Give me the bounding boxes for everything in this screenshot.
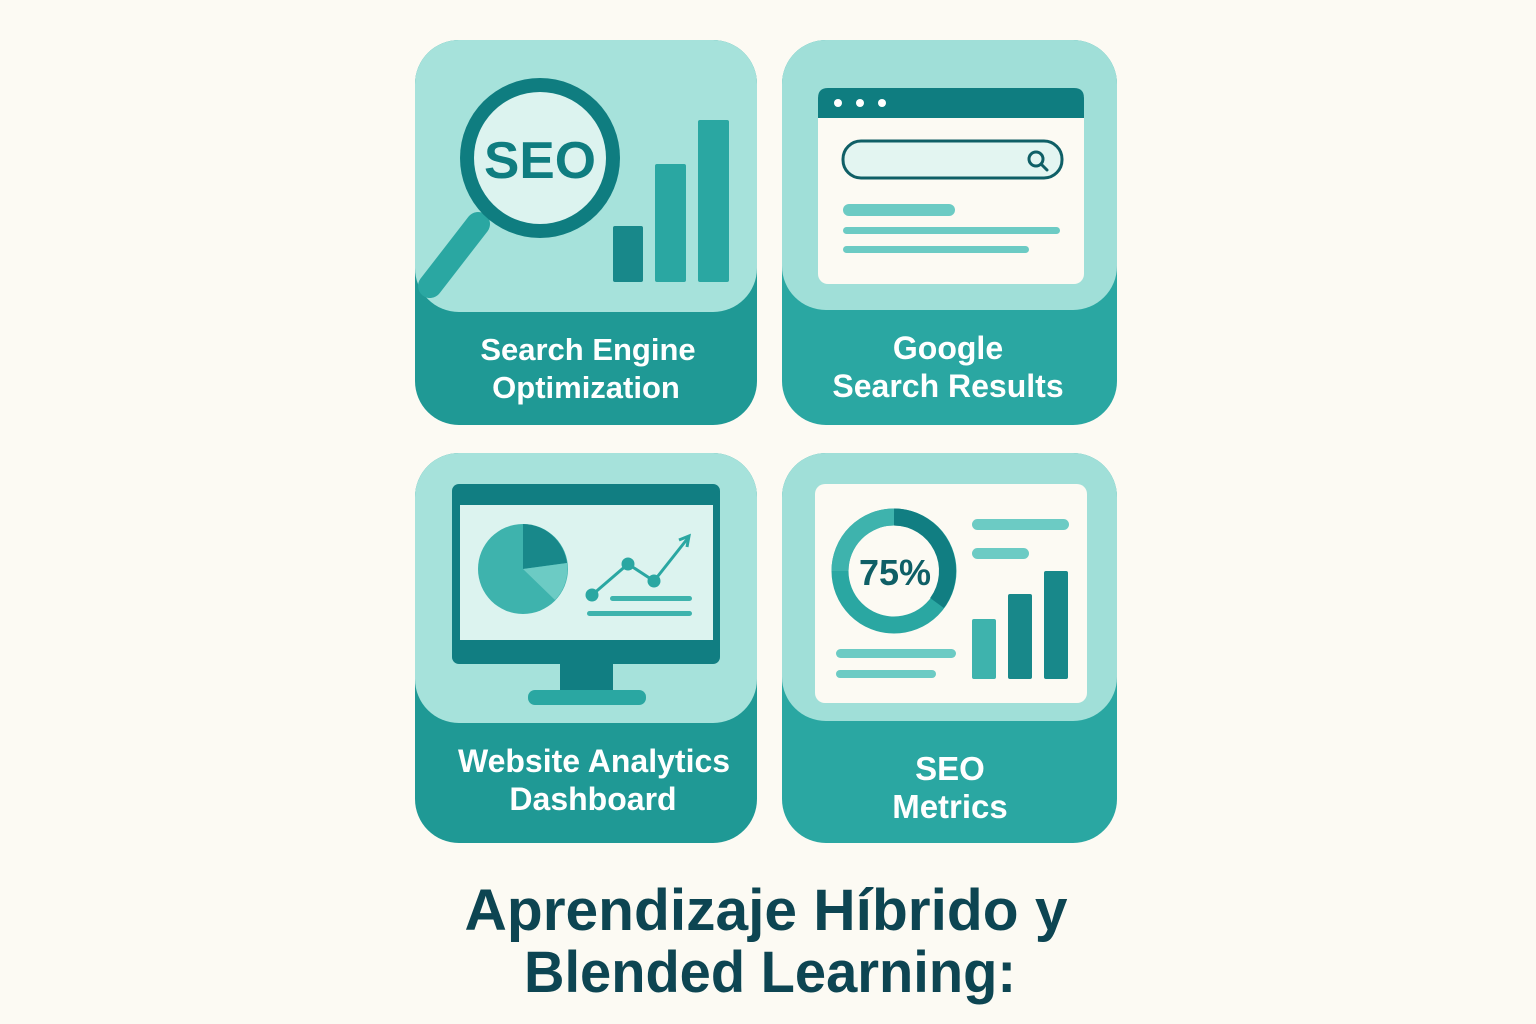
- icon: monitor: [452, 484, 720, 705]
- panel: google search results: Search Results: [832, 368, 1064, 404]
- title: [464, 878, 1068, 1005]
- panel: google search results: [782, 40, 1117, 425]
- label: SEO: [915, 750, 985, 787]
- pie chart: [478, 524, 568, 614]
- icon: metrics card: [815, 484, 1087, 703]
- panel: seo metrics: Metrics: [892, 788, 1008, 825]
- bar chart: [613, 120, 729, 282]
- icon: browser window: [818, 88, 1084, 284]
- label: Google: [893, 330, 1003, 366]
- panel: search engine optimization: [415, 40, 757, 425]
- donut 75%: [840, 517, 948, 625]
- title: Aprendizaje Híbrido y: [464, 878, 1068, 943]
- panel: search engine optimization: Optimization: [492, 370, 680, 405]
- title: Blended Learning:: [524, 940, 1016, 1005]
- bar chart: [972, 571, 1068, 679]
- icon: magnifier SEO: SEO: [484, 132, 596, 190]
- label: Search Engine: [480, 332, 696, 367]
- panel: seo metrics: [782, 453, 1117, 843]
- icon: magnifier SEO: [430, 78, 620, 286]
- panel: website analytics dashboard: Dashboard: [509, 781, 677, 817]
- panel: website analytics dashboard: [415, 453, 757, 843]
- label: Website Analytics: [458, 743, 730, 779]
- line chart: [587, 536, 689, 600]
- donut 75%: 75%: [859, 552, 931, 593]
